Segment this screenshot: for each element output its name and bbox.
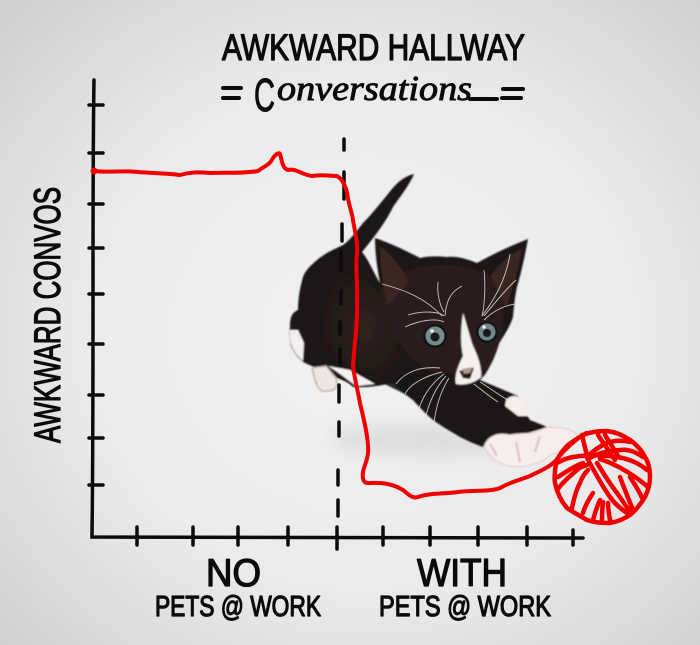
head shading xyxy=(380,265,504,376)
title xyxy=(222,27,525,121)
title: AWKWARD HALLWAY xyxy=(222,27,525,68)
x label: no pets at work: NO xyxy=(206,552,261,595)
dashed divider xyxy=(338,139,344,516)
white hind leg and paw xyxy=(290,330,304,361)
y axis ticks xyxy=(89,105,103,485)
ear interiors xyxy=(380,246,409,305)
body and tail silhouette xyxy=(290,174,547,447)
graph axes xyxy=(89,80,583,549)
subtitle: C xyxy=(254,69,275,121)
yarn ball xyxy=(555,431,650,523)
kitten photo illustration xyxy=(290,174,578,467)
white face stripe and muzzle xyxy=(455,313,481,385)
x label: no pets at work: PETS @ WORK xyxy=(155,591,322,623)
title: onversations xyxy=(277,69,472,108)
y axis label: AWKWARD CONVOS xyxy=(27,187,68,443)
red data line xyxy=(90,153,586,497)
x axis ticks xyxy=(137,527,573,549)
white front paws xyxy=(484,427,578,467)
kitten whiskers xyxy=(382,254,516,422)
x label: with pets at work xyxy=(379,552,552,623)
x label: with pets at work: PETS @ WORK xyxy=(379,591,552,623)
kitten eyes xyxy=(423,324,447,348)
x label: no pets at work xyxy=(155,552,322,623)
x label: with pets at work: WITH xyxy=(417,552,507,595)
